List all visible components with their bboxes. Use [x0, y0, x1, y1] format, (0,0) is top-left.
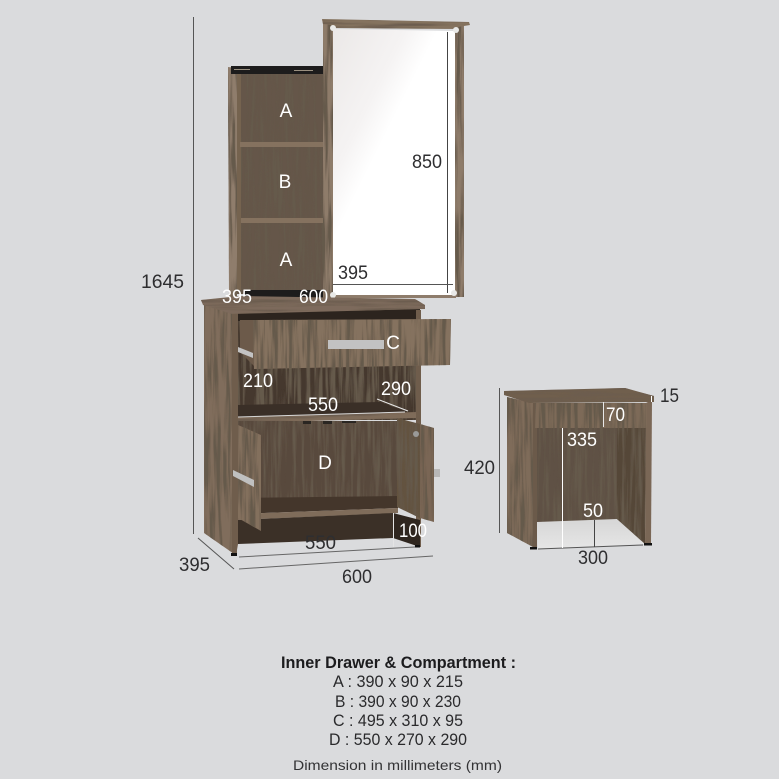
plinth height white line — [392, 513, 394, 547]
cabinet top — [201, 296, 425, 314]
shelf width white line — [238, 412, 405, 417]
label 600: 600 — [342, 567, 372, 588]
cabinet right foot inner panel — [393, 513, 420, 547]
stool width line — [538, 545, 643, 549]
lower compartment back — [238, 421, 399, 498]
left door — [238, 425, 261, 531]
label 850: 850 — [412, 152, 442, 173]
drawer handle — [328, 340, 384, 349]
stool left side — [507, 397, 533, 547]
overall height line — [192, 17, 194, 534]
stool — [504, 388, 654, 550]
stool clearance line — [594, 520, 596, 547]
label depth 395: 395 — [179, 555, 210, 576]
mirror height line — [446, 32, 448, 293]
cabinet — [201, 296, 451, 556]
label base 550: 550 — [305, 533, 336, 554]
cabinet feet — [231, 545, 420, 556]
cabinet right side panel — [416, 310, 421, 547]
stool apron — [535, 403, 647, 428]
open compartment shelf surface — [238, 402, 408, 417]
stool top thickness white tick — [650, 396, 652, 402]
label 290: 290 — [381, 379, 411, 400]
top rail shadow — [236, 307, 420, 321]
550 width line — [239, 547, 415, 557]
open shelf front edge — [237, 412, 417, 423]
label 420: 420 — [464, 458, 495, 479]
label 335: 335 — [567, 430, 597, 451]
mirror fixing dots — [330, 25, 459, 298]
lower floor front edge — [238, 508, 398, 520]
shelf bottom black strip — [245, 290, 325, 298]
stool left front edge — [533, 403, 537, 549]
cabinet interior back — [236, 310, 420, 420]
shelf depth white line — [377, 399, 408, 411]
label D: D — [318, 453, 332, 474]
cabinet left side panel — [204, 305, 237, 556]
cabinet plinth — [238, 513, 393, 544]
stool feet — [530, 543, 652, 550]
label 100: 100 — [399, 521, 427, 542]
label B: B — [279, 172, 291, 193]
stool back panel — [537, 427, 645, 522]
label 300: 300 — [578, 548, 608, 569]
mirror frame left post — [323, 22, 334, 299]
specification heading: Inner Drawer & Compartment : — [281, 654, 516, 672]
drawer front — [253, 319, 451, 369]
depth line — [198, 538, 234, 569]
dimension labels — [141, 101, 679, 588]
shelf unit — [228, 66, 325, 298]
stool top — [504, 388, 654, 403]
label A lower: A — [280, 250, 293, 271]
drawer side — [240, 320, 254, 366]
row C: C : 495 x 310 x 95 — [333, 712, 463, 730]
stool inner height white line — [562, 428, 564, 548]
label white 600: 600 — [299, 287, 328, 308]
label shelf 550: 550 — [308, 395, 338, 416]
shelf left side post — [228, 67, 237, 298]
shelf back panel — [237, 72, 324, 294]
shelf inner strip — [237, 74, 241, 290]
right door inner face — [397, 418, 420, 518]
label mirror 395: 395 — [338, 263, 368, 284]
label 1645: 1645 — [141, 272, 184, 293]
stool right front edge — [645, 400, 652, 545]
label 210: 210 — [243, 371, 273, 392]
strip fixing dots — [234, 69, 313, 71]
mirror width line — [333, 284, 453, 286]
stool height line — [498, 388, 500, 533]
right door handle — [434, 469, 440, 477]
right door edge — [420, 424, 434, 522]
shelf underside fittings — [303, 421, 356, 424]
label white 395: 395 — [222, 287, 252, 308]
stool right inner panel — [617, 427, 646, 544]
left door handle — [233, 470, 254, 487]
lower shelf board — [241, 218, 324, 223]
mirror glass — [333, 29, 455, 295]
600 width line — [239, 556, 433, 569]
label C: C — [386, 333, 400, 354]
mirror frame top bar — [322, 19, 470, 29]
door hinge — [413, 431, 419, 437]
mirror — [322, 19, 470, 299]
label A upper: A — [280, 101, 293, 122]
label 70: 70 — [606, 405, 625, 426]
lower compartment floor — [238, 496, 398, 514]
inner compartment specification — [281, 654, 516, 773]
stool apron height white line — [602, 402, 604, 427]
label 15: 15 — [660, 386, 679, 407]
stool floor gap — [537, 519, 645, 549]
mirror frame right post — [454, 26, 464, 297]
mirror frame bottom bar — [331, 293, 456, 298]
row A: A : 390 x 90 x 215 — [333, 673, 463, 691]
cabinet left front edge — [232, 311, 238, 556]
upper shelf board — [240, 142, 324, 147]
label 50: 50 — [583, 501, 603, 522]
dimension lines — [194, 17, 652, 569]
row D: D : 550 x 270 x 290 — [329, 731, 467, 749]
shelf top black strip — [231, 66, 324, 74]
drawer rail — [238, 347, 253, 358]
units note: Dimension in millimeters (mm) — [293, 757, 502, 773]
row B: B : 390 x 90 x 230 — [335, 693, 461, 711]
